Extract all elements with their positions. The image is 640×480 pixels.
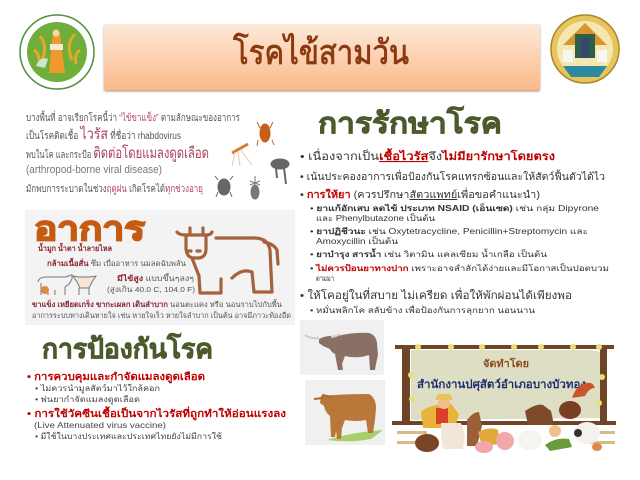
text: office name: สำนักงานปศุสัตว์อำเภอบางบัวทอง bbox=[417, 378, 586, 392]
illustration: farmer and animals bbox=[397, 383, 615, 453]
icon: large cow outline bbox=[177, 228, 278, 293]
logo: ministry of agriculture seal bbox=[20, 15, 94, 89]
text: transmission: พบในโค และกระบือ ติดต่อโดยแมลงดูดเลือด bbox=[26, 144, 209, 162]
text: vaccine english: (Live Attenuated virus vaccine) bbox=[34, 421, 166, 430]
logo: livestock department seal bbox=[551, 15, 619, 83]
text: virus: เป็นโรคติดเชื้อ ไวรัส ที่ชื่อว่า rhabdovirus bbox=[26, 125, 181, 143]
illustration: organiser sign with farm animals bbox=[392, 344, 616, 453]
sign: wooden frame bbox=[392, 345, 616, 425]
icon: louse bbox=[250, 176, 260, 199]
icon: mosquito bbox=[232, 144, 252, 166]
image: brown bull bbox=[305, 380, 385, 445]
text: season: มักพบการระบาดในช่วงฤดูฝน เกิดโรคได้ทุกช่วงอายุ bbox=[26, 182, 203, 195]
text: muscle tremor: กล้ามเนื้อสั่น ซึม เบื่ออาหาร นมลดฉับพลัน bbox=[47, 257, 186, 268]
sub-bullet: housing: • ไม่ควรนำมูลสัตว์มาไว้ใกล้คอก bbox=[35, 383, 160, 394]
text: high fever: มีไข้สูง แบบขึ้นๆลงๆ bbox=[117, 273, 194, 284]
title banner bbox=[104, 24, 540, 90]
image: buffalo bbox=[300, 320, 384, 375]
text: organised by: จัดทำโดย bbox=[483, 357, 529, 370]
icon: tick bbox=[215, 176, 233, 197]
bullet: vaccine: • การใช้วัคซีนเชื้อเป็นจากไวรัสที่ถูกทำให้อ่อนแรงลง bbox=[27, 406, 286, 421]
text: respiratory: อาการระบบทางเดินหายใจ เช่น หายใจเร็ว หายใจลำบาก เป็นต้น อาจมีภาวะท้องอืด bbox=[32, 310, 291, 320]
heading: treatment: การรักษาโรค bbox=[318, 105, 502, 140]
bullet: symptomatic care: • เน้นประคองอาการเพื่อป้องกันโรคแทรกซ้อนและให้สัตว์ฟื้นตัวได้ไว bbox=[300, 169, 605, 183]
icon: fly bbox=[257, 122, 274, 146]
icon: small cow front view bbox=[73, 276, 96, 295]
sub-bullet: spray: • พ่นยากำจัดแมลงดูดเลือด bbox=[35, 395, 140, 405]
icon: flea bbox=[271, 159, 289, 184]
icons: biting insects bbox=[215, 122, 289, 199]
sub-bullet: no oral drugs continued: ตามมา bbox=[316, 274, 334, 283]
text: discharge: น้ำมูก น้ำตา น้ำลายไหล bbox=[38, 242, 112, 254]
sub-bullet: availability: • มีใช้ในบางประเทศและประเทศไทยยังไม่มีการใช้ bbox=[35, 432, 223, 441]
heading: symptoms: อาการ bbox=[34, 210, 145, 247]
text: alternate name: บางพื้นที่ อาจเรียกโรคนี้ว่า “ไข้ขาแข็ง” ตามลักษณะของอาการ bbox=[26, 110, 240, 124]
heading: prevention: การป้องกันโรค bbox=[42, 332, 213, 364]
panel: prevention bbox=[27, 332, 286, 441]
sub-bullet: antibiotics: • ยาปฏิชีวนะ เช่น Oxytetracycline, Penicillin+Streptomycin และ bbox=[310, 226, 588, 236]
sub-bullet: NSAID continued: และ Phenylbutazone เป็นต้น bbox=[316, 213, 436, 223]
icon: small cow side view bbox=[38, 275, 72, 295]
panel: treatment bbox=[300, 105, 609, 315]
bullet: insect control: • การควบคุมและกำจัดแมลงดูดเลือด bbox=[27, 371, 205, 384]
sign: yellow bows bbox=[408, 344, 605, 406]
panel: symptoms bbox=[25, 210, 295, 325]
text: temperature: (สูงเกิน 40.0 C, 104.0 F) bbox=[107, 285, 196, 294]
sign: cloth bbox=[411, 350, 601, 420]
text: arthropod-borne: (arthropod-borne viral disease) bbox=[26, 164, 162, 176]
sub-bullet: no oral drugs: • ไม่ควรป้อนยาทางปาก เพราะอาจสำลักได้ง่ายและมีโอกาสเป็นปอดบวม bbox=[310, 263, 609, 273]
title: โรคไข้สามวัน bbox=[233, 33, 409, 72]
sub-bullet: antibiotics continued: Amoxycillin เป็นต้น bbox=[316, 236, 399, 246]
text: stiff legs: ขาแข็ง เหยียดเกร็ง ขากะเผลก เดินลำบาก นอนตะแคง หรือ นอนราบไปกับพื้น bbox=[32, 299, 282, 309]
bullet: no direct treatment: • เนื่องจากเป็น เชื้อไวรัส จึงไม่มียารักษาโดยตรง bbox=[300, 148, 555, 163]
sub-bullet: NSAID: • ยาแก้อักเสบ ลดไข้ ประเภท NSAID (เอ็นเซด) เช่น กลุ่ม Dipyrone bbox=[310, 202, 600, 213]
bullet: medication: • การให้ยา (ควรปรึกษา สัตวแพทย์ เพื่อขอคำแนะนำ) bbox=[300, 187, 540, 201]
panel: disease description bbox=[26, 110, 240, 195]
bullet: rest: • ให้โคอยู่ในที่สบาย ไม่เครียด เพื่อให้พักผ่อนได้เพียงพอ bbox=[300, 287, 572, 302]
sub-bullet: supplements: • ยาบำรุง สารน้ำ เช่น วิตามิน แคลเซียม น้ำเกลือ เป็นต้น bbox=[310, 248, 548, 260]
sub-bullet: turning: • หมั่นพลิกโค สลับข้าง เพื่อป้องกันการลุกยาก นอนนาน bbox=[310, 304, 536, 315]
